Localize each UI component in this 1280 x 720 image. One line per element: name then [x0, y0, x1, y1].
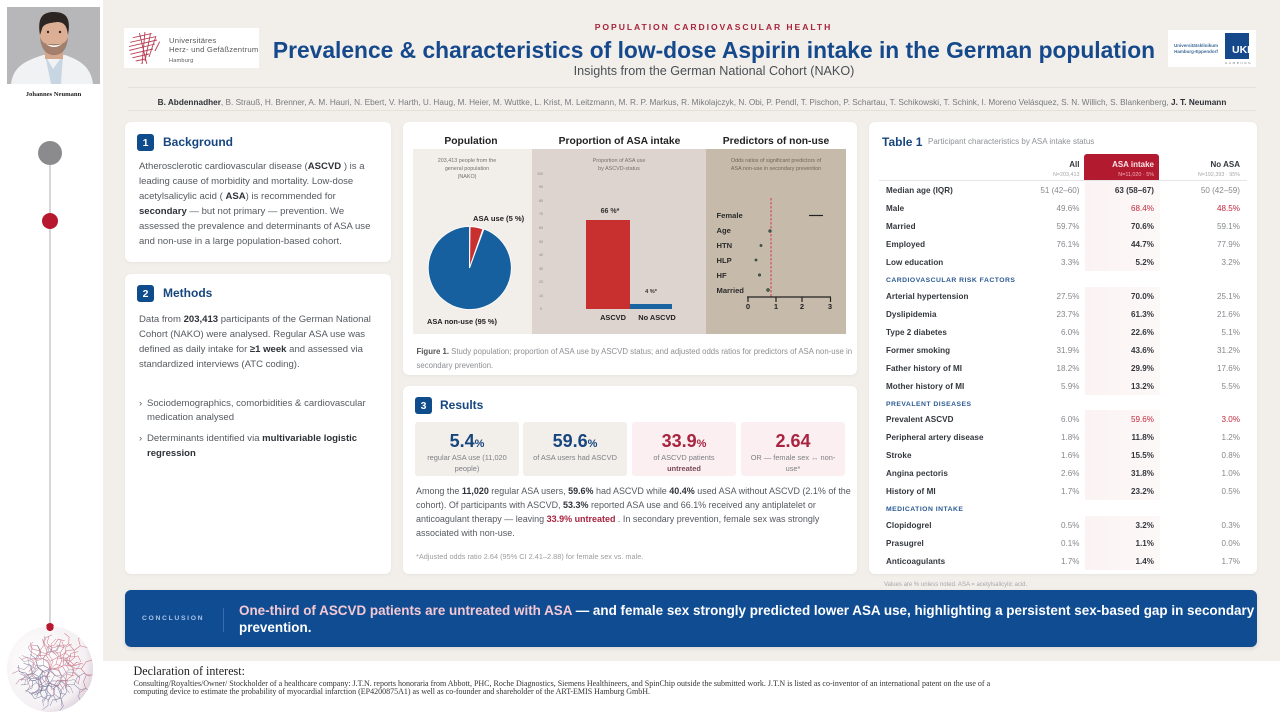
rows: cardiovascular risk factors: 17.6%	[1217, 364, 1240, 373]
forest plot: predictors of non-use: Age	[716, 226, 731, 235]
rows: cardiovascular risk factors: 27.5%	[1057, 292, 1080, 301]
panel: methods: Sociodemographics, comorbidities & cardiovascular	[147, 398, 366, 409]
forest plot: predictors of non-use	[716, 158, 832, 311]
rows: cardiovascular risk factors: Former smoking	[886, 346, 950, 355]
heading: predictors of non-use: Predictors of non-use	[723, 136, 829, 147]
institutional logo: UKE: Hamburg-Eppendorf	[1174, 49, 1218, 54]
pie chart: ASA use: ASA use (5 %)	[473, 214, 525, 223]
rows: medication intake: 1.7%	[1222, 557, 1240, 566]
bar chart: proportion of ASA use by ASCVD status: 50	[539, 240, 543, 244]
stat: ASA users with ASCVD: of ASA users had ASCVD	[533, 453, 617, 462]
bar chart: proportion of ASA use by ASCVD status: 40	[539, 253, 543, 257]
stat: regular ASA use: people)	[455, 464, 479, 473]
conclusion statement	[239, 603, 1254, 635]
conclusion statement: prevention.	[239, 620, 311, 635]
results narrative: cohort). Of participants with ASCVD, 53.3% reported ASA use and 66.1% received any antiplatelet or	[416, 500, 816, 510]
table header rule	[879, 180, 1247, 181]
panel: figure 1	[403, 122, 857, 375]
rows: demographics: 77.9%	[1217, 240, 1240, 249]
bar chart: proportion of ASA use by ASCVD status: 80	[539, 199, 543, 203]
pie chart: ASA use: (NAKO)	[458, 174, 477, 180]
column header: All: N=203,413	[1053, 172, 1080, 178]
pie chart: ASA use: general population	[445, 166, 489, 172]
rows: cardiovascular risk factors: 13.2%	[1131, 382, 1154, 391]
panel: methods: regression	[147, 448, 196, 459]
bar chart: proportion of ASA use by ASCVD status: 10	[539, 294, 543, 298]
column header: No ASA: N=192,393 · 95%	[1198, 172, 1240, 178]
panel: background	[125, 122, 391, 262]
rows: prevalent diseases: 0.8%	[1222, 451, 1240, 460]
rows: medication intake: 0.1%	[1061, 539, 1080, 548]
heading: proportion of ASA intake: Proportion of ASA intake	[559, 136, 680, 147]
forest plot: predictors of non-use: 2	[800, 302, 804, 311]
bar chart: proportion of ASA use by ASCVD status: 20	[539, 280, 543, 284]
rows: demographics: Low education	[886, 258, 943, 267]
table footnote: Values are % unless noted. ASA = acetylsalicylic acid.	[884, 582, 1027, 588]
section label: prevalent diseases: PREVALENT DISEASES	[886, 401, 972, 408]
results narrative: associated with non-use.	[416, 528, 515, 538]
forest plot: predictors of non-use: 3	[828, 302, 832, 311]
institutional logo: Herz- und Gefäßzentrum	[124, 28, 259, 68]
rows: cardiovascular risk factors: 43.6%	[1131, 346, 1154, 355]
column header: All	[1053, 160, 1080, 178]
rows: demographics: 68.4%	[1131, 204, 1154, 213]
results narrative: Among the 11,020 regular ASA users, 59.6% had ASCVD while 40.4% used ASA without ASCVD (2.1% of the	[416, 486, 851, 496]
stat: untreated ASCVD patients: of ASCVD patients	[653, 453, 715, 462]
column header: ASA intake	[1084, 154, 1159, 181]
institutional logo: Herz- und Gefäßzentrum: Hamburg	[169, 58, 193, 64]
section number 3	[415, 397, 432, 414]
methods bullet 1: ›	[139, 398, 142, 409]
background text	[139, 161, 370, 247]
column header: No ASA	[1198, 160, 1240, 178]
panel backgrounds	[413, 149, 846, 334]
rows: cardiovascular risk factors: Father history of MI	[886, 364, 962, 373]
rows: prevalent diseases: 1.8%	[1061, 433, 1080, 442]
results narrative	[416, 486, 851, 538]
conclusion label: CONCLUSION	[142, 615, 204, 622]
bar chart: proportion of ASA use by ASCVD status: by ASCVD-status	[598, 166, 640, 172]
section number 2	[137, 285, 154, 302]
rows: medication intake: 0.0%	[1222, 539, 1240, 548]
forest plot: predictors of non-use: HLP	[716, 256, 732, 265]
stat: odds ratio for female sex: use*	[786, 464, 800, 473]
rows: demographics: 44.7%	[1131, 240, 1154, 249]
rows: demographics: 49.6%	[1057, 204, 1080, 213]
rows: medication intake: 1.1%	[1136, 539, 1154, 548]
rows: prevalent diseases: 3.0%	[1222, 415, 1240, 424]
rows: medication intake: 0.5%	[1061, 521, 1080, 530]
rows: demographics: 76.1%	[1057, 240, 1080, 249]
presenter name: Johannes Neumann	[26, 91, 81, 98]
forest plot: predictors of non-use: Odds ratios of significant predictors of	[731, 158, 822, 164]
forest plot: predictors of non-use: 1	[774, 302, 779, 311]
rows: medication intake: 0.3%	[1222, 521, 1240, 530]
institutional logo: UKE: Universitätsklinikum	[1174, 43, 1218, 48]
rows: demographics: 50 (42–59)	[1201, 186, 1240, 195]
figure caption: secondary prevention.	[416, 361, 493, 370]
stat: ASA users with ASCVD	[523, 422, 627, 476]
section label: cardiovascular risk factors: CARDIOVASCULAR RISK FACTORS	[886, 277, 1015, 284]
stat: ASA users with ASCVD: 59.6%	[553, 431, 597, 451]
methods bullet 2: ›	[139, 433, 142, 444]
rows: prevalent diseases: Peripheral artery disease	[886, 433, 984, 442]
bar chart: proportion of ASA use by ASCVD status: 0	[540, 307, 542, 311]
rows: cardiovascular risk factors: 5.5%	[1222, 382, 1240, 391]
results narrative: anticoagulant therapy — leaving 33.9% untreated . In secondary prevention, female sex was strongly	[416, 514, 819, 524]
rows: cardiovascular risk factors: 5.9%	[1061, 382, 1080, 391]
methods text: defined as daily intake for ≥1 week and assessed via	[139, 344, 363, 355]
column header: ASA intake: N=11,020 · 5%	[1118, 172, 1154, 178]
background text: and non-use in a large population-based cohort.	[139, 236, 342, 247]
table heading: Table 1	[882, 135, 922, 149]
conclusion banner	[125, 590, 1257, 647]
heading: background: Background	[163, 135, 233, 149]
stat: regular ASA use	[415, 422, 519, 476]
pie chart: ASA use: ASA non-use (95 %)	[427, 317, 497, 326]
rows: demographics: 63 (58–67)	[1115, 186, 1154, 195]
rows: cardiovascular risk factors: 5.1%	[1222, 328, 1240, 337]
rows: prevalent diseases: 2.6%	[1061, 469, 1080, 478]
results footnote: *Adjusted odds ratio 2.64 (95% CI 2.41–2.88) for female sex vs. male.	[416, 552, 643, 561]
rows: prevalent diseases: 1.0%	[1222, 469, 1240, 478]
bar chart: proportion of ASA use by ASCVD status: 66 %*	[601, 208, 620, 215]
institutional logo: Herz- und Gefäßzentrum: Universitäres	[169, 36, 216, 45]
bar chart: proportion of ASA use by ASCVD status: 70	[539, 212, 543, 216]
bar chart: proportion of ASA use by ASCVD status: 90	[539, 185, 543, 189]
rows: medication intake: 3.2%	[1136, 521, 1154, 530]
section number 3: 3	[421, 400, 426, 412]
rows: cardiovascular risk factors: 25.1%	[1217, 292, 1240, 301]
rows: cardiovascular risk factors: 6.0%	[1061, 328, 1080, 337]
figure panels: pie chart, bar chart, forest plot	[413, 149, 846, 334]
institutional logo: UKE: HAMBURG	[1225, 61, 1252, 65]
background text: acetylsalicylic acid ( ASA) is recommended for	[139, 191, 336, 202]
rows: demographics: Male	[886, 204, 904, 213]
timeline with progress markers	[38, 141, 62, 626]
stat: untreated ASCVD patients: 33.9%	[662, 431, 706, 451]
rows: cardiovascular risk factors: 61.3%	[1131, 310, 1154, 319]
stat: odds ratio for female sex	[741, 422, 845, 476]
rows: cardiovascular risk factors: 23.7%	[1057, 310, 1080, 319]
conclusion divider	[223, 608, 224, 632]
rows: medication intake	[886, 521, 1240, 566]
rows: cardiovascular risk factors: 21.6%	[1217, 310, 1240, 319]
rows: cardiovascular risk factors: Arterial hypertension	[886, 292, 968, 301]
rows: prevalent diseases: Stroke	[886, 451, 912, 460]
section number 1	[137, 134, 154, 151]
institutional logo: UKE	[1168, 30, 1256, 67]
forest plot: predictors of non-use: Female	[716, 211, 743, 220]
author list	[128, 87, 1256, 111]
forest plot: predictors of non-use: HF	[716, 271, 727, 280]
presenter portrait photo	[7, 7, 100, 84]
rows: demographics: Median age (IQR)	[886, 186, 953, 195]
column header: ASA intake: ASA intake	[1112, 160, 1154, 169]
declaration of interest text: Consulting/Royalties/Owner/ Stockholder of a healthcare company: J.T.N. reports honoraria from Abbott, PHC, Roche Diagnostics, Siemens Healthineers, and SpinChip outside the submitted work. J.T.N is listed as co-inventor of an international patent on the use of a	[134, 679, 990, 688]
rows: cardiovascular risk factors: 31.9%	[1057, 346, 1080, 355]
panel: methods	[125, 274, 391, 574]
bar chart: proportion of ASA use by ASCVD status: No ASCVD	[638, 313, 676, 322]
methods text: standardized interviews (ATC coding).	[139, 359, 300, 370]
stat: untreated ASCVD patients: untreated	[667, 464, 701, 473]
rows: cardiovascular risk factors: 18.2%	[1057, 364, 1080, 373]
bar chart: proportion of ASA use by ASCVD status: 4 %*	[645, 289, 658, 295]
panel: results	[403, 386, 857, 574]
methods text: Data from 203,413 participants of the German National	[139, 314, 371, 325]
column header: All: All	[1069, 160, 1080, 169]
rows: prevalent diseases: 59.6%	[1131, 415, 1154, 424]
kicker: POPULATION CARDIOVASCULAR HEALTH	[595, 22, 832, 32]
forest plot: predictors of non-use: 0	[746, 302, 750, 311]
stat: regular ASA use: regular ASA use (11,020	[427, 453, 507, 462]
heading: population: Population	[444, 136, 498, 147]
rows: demographics: Employed	[886, 240, 925, 249]
rows: demographics: 5.2%	[1136, 258, 1154, 267]
stat: odds ratio for female sex: OR — female sex ↔ non-	[751, 453, 835, 462]
rows: demographics: 59.1%	[1217, 222, 1240, 231]
bar chart: proportion of ASA use by ASCVD status: ASCVD	[600, 313, 627, 322]
background text: assessed the prevalence and determinants of ASA use	[139, 221, 370, 232]
rows: prevalent diseases: Prevalent ASCVD	[886, 415, 953, 424]
declaration of interest text: computing device to estimate the probability of myocardial infarction (EP4200875A1) as well as co-founder and shareholder of the ART-EMIS Hamburg GmbH.	[134, 687, 650, 696]
rows: cardiovascular risk factors: 70.0%	[1131, 292, 1154, 301]
panel: table 1	[869, 122, 1257, 574]
methods bullet 2	[139, 433, 357, 459]
rows: prevalent diseases: 1.7%	[1061, 487, 1080, 496]
rows: demographics: 48.5%	[1217, 204, 1240, 213]
rows: prevalent diseases: 31.8%	[1131, 469, 1154, 478]
background text: secondary — but not primary — prevention. We	[139, 206, 344, 217]
forest plot: predictors of non-use: ASA non-use in secondary prevention	[731, 166, 821, 172]
institutional logo: Herz- und Gefäßzentrum: Herz- und Gefäßzentrum	[169, 45, 258, 54]
vascular sphere illustration	[7, 626, 93, 712]
rows: demographics: 51 (42–60)	[1040, 186, 1080, 195]
bar chart: proportion of ASA use by ASCVD status: Proportion of ASA use	[593, 158, 645, 164]
figure caption: Figure 1. Study population; proportion of ASA use by ASCVD status; and adjusted odds ratios for predictors of ASA non-use in	[416, 347, 852, 356]
section number 2: 2	[143, 288, 148, 300]
rows: medication intake: 1.7%	[1061, 557, 1080, 566]
stat: odds ratio for female sex: 2.64	[775, 431, 811, 451]
rows: prevalent diseases: 1.6%	[1061, 451, 1080, 460]
declaration of interest heading: Declaration of interest:	[134, 664, 245, 678]
stat: regular ASA use: 5.4%	[450, 431, 484, 451]
heading: methods: Methods	[163, 286, 212, 300]
panel: methods: medication analysed	[147, 412, 234, 423]
rows: prevalent diseases: 11.8%	[1131, 433, 1154, 442]
rows: prevalent diseases: History of MI	[886, 487, 936, 496]
rows: prevalent diseases: 23.2%	[1131, 487, 1154, 496]
highlight bands	[1085, 181, 1160, 271]
forest plot: predictors of non-use: HTN	[716, 241, 732, 250]
subtitle: Insights from the German National Cohort (NAKO)	[574, 64, 854, 78]
rows: demographics: 3.2%	[1222, 258, 1240, 267]
rows: demographics: 59.7%	[1057, 222, 1080, 231]
figure caption	[416, 347, 852, 370]
rows: prevalent diseases: Angina pectoris	[886, 469, 948, 478]
methods bullet 1	[139, 398, 366, 423]
rows: prevalent diseases: 15.5%	[1131, 451, 1154, 460]
bar chart: proportion of ASA use by ASCVD status: 100	[537, 172, 543, 176]
pie chart: ASA use	[427, 158, 525, 326]
rows: cardiovascular risk factors: 29.9%	[1131, 364, 1154, 373]
rows: cardiovascular risk factors: 31.2%	[1217, 346, 1240, 355]
bar chart: proportion of ASA use by ASCVD status	[537, 158, 676, 322]
rows: medication intake: 1.4%	[1136, 557, 1154, 566]
rows: prevalent diseases: 0.5%	[1222, 487, 1240, 496]
rows: medication intake: Anticoagulants	[886, 557, 945, 566]
declaration of interest text	[134, 679, 990, 696]
rows: demographics: Married	[886, 222, 916, 231]
title: Prevalence & characteristics of low-dose Aspirin intake in the German population	[273, 37, 1155, 63]
forest plot: predictors of non-use: Married	[716, 286, 744, 295]
rows: demographics	[886, 186, 1240, 267]
rows: demographics: 3.3%	[1061, 258, 1080, 267]
rows: medication intake: Clopidogrel	[886, 521, 932, 530]
rows: cardiovascular risk factors: 22.6%	[1131, 328, 1154, 337]
bar chart: proportion of ASA use by ASCVD status: 30	[539, 267, 543, 271]
rows: demographics: 70.6%	[1131, 222, 1154, 231]
rows: cardiovascular risk factors	[886, 292, 1240, 391]
rows: prevalent diseases	[886, 415, 1240, 496]
background text: leading cause of morbidity and mortality. Low-dose	[139, 176, 353, 187]
rows: cardiovascular risk factors: Dyslipidemia	[886, 310, 937, 319]
author list: B. Abdennadher, B. Strauß, H. Brenner, A. M. Hauri, N. Ebert, V. Harth, U. Haug, M. Heier, M. Wuttke, L. Krist, M. Leitzmann, M. R. P. Markus, R. Mikolajczyk, N. Obi, P. Pendl, T. Pischon, P. Schartau, T. Schikowski, T. Schink, I. Moreno Velásquez, S. N. Willich, S. Blankenberg, J. T. Neumann	[158, 98, 1226, 107]
background text: Atherosclerotic cardiovascular disease (ASCVD ) is a	[139, 161, 365, 172]
methods text: Cohort (NAKO) were analysed. Regular ASA use was	[139, 329, 365, 340]
rows: cardiovascular risk factors: Mother history of MI	[886, 382, 964, 391]
panel: methods: Determinants identified via multivariable logistic	[147, 433, 357, 444]
column header: No ASA: No ASA	[1211, 160, 1240, 169]
methods text	[139, 314, 371, 370]
rows: prevalent diseases: 1.2%	[1222, 433, 1240, 442]
stat: untreated ASCVD patients	[632, 422, 736, 476]
pie chart: ASA use: 203,413 people from the	[438, 158, 496, 164]
rows: medication intake: Prasugrel	[886, 539, 924, 548]
heading: results: Results	[440, 398, 483, 412]
bar chart: proportion of ASA use by ASCVD status: 60	[539, 226, 543, 230]
table subtitle: Participant characteristics by ASA intake status	[928, 137, 1094, 146]
rows: cardiovascular risk factors: Type 2 diabetes	[886, 328, 947, 337]
rows: prevalent diseases: 6.0%	[1061, 415, 1080, 424]
section label: medication intake: MEDICATION INTAKE	[886, 506, 963, 513]
conclusion statement: One-third of ASCVD patients are untreated with ASA — and female sex strongly predicted lower ASA use, highlighting a persistent sex-based gap in secondary	[239, 603, 1254, 618]
section number 1: 1	[143, 137, 148, 149]
